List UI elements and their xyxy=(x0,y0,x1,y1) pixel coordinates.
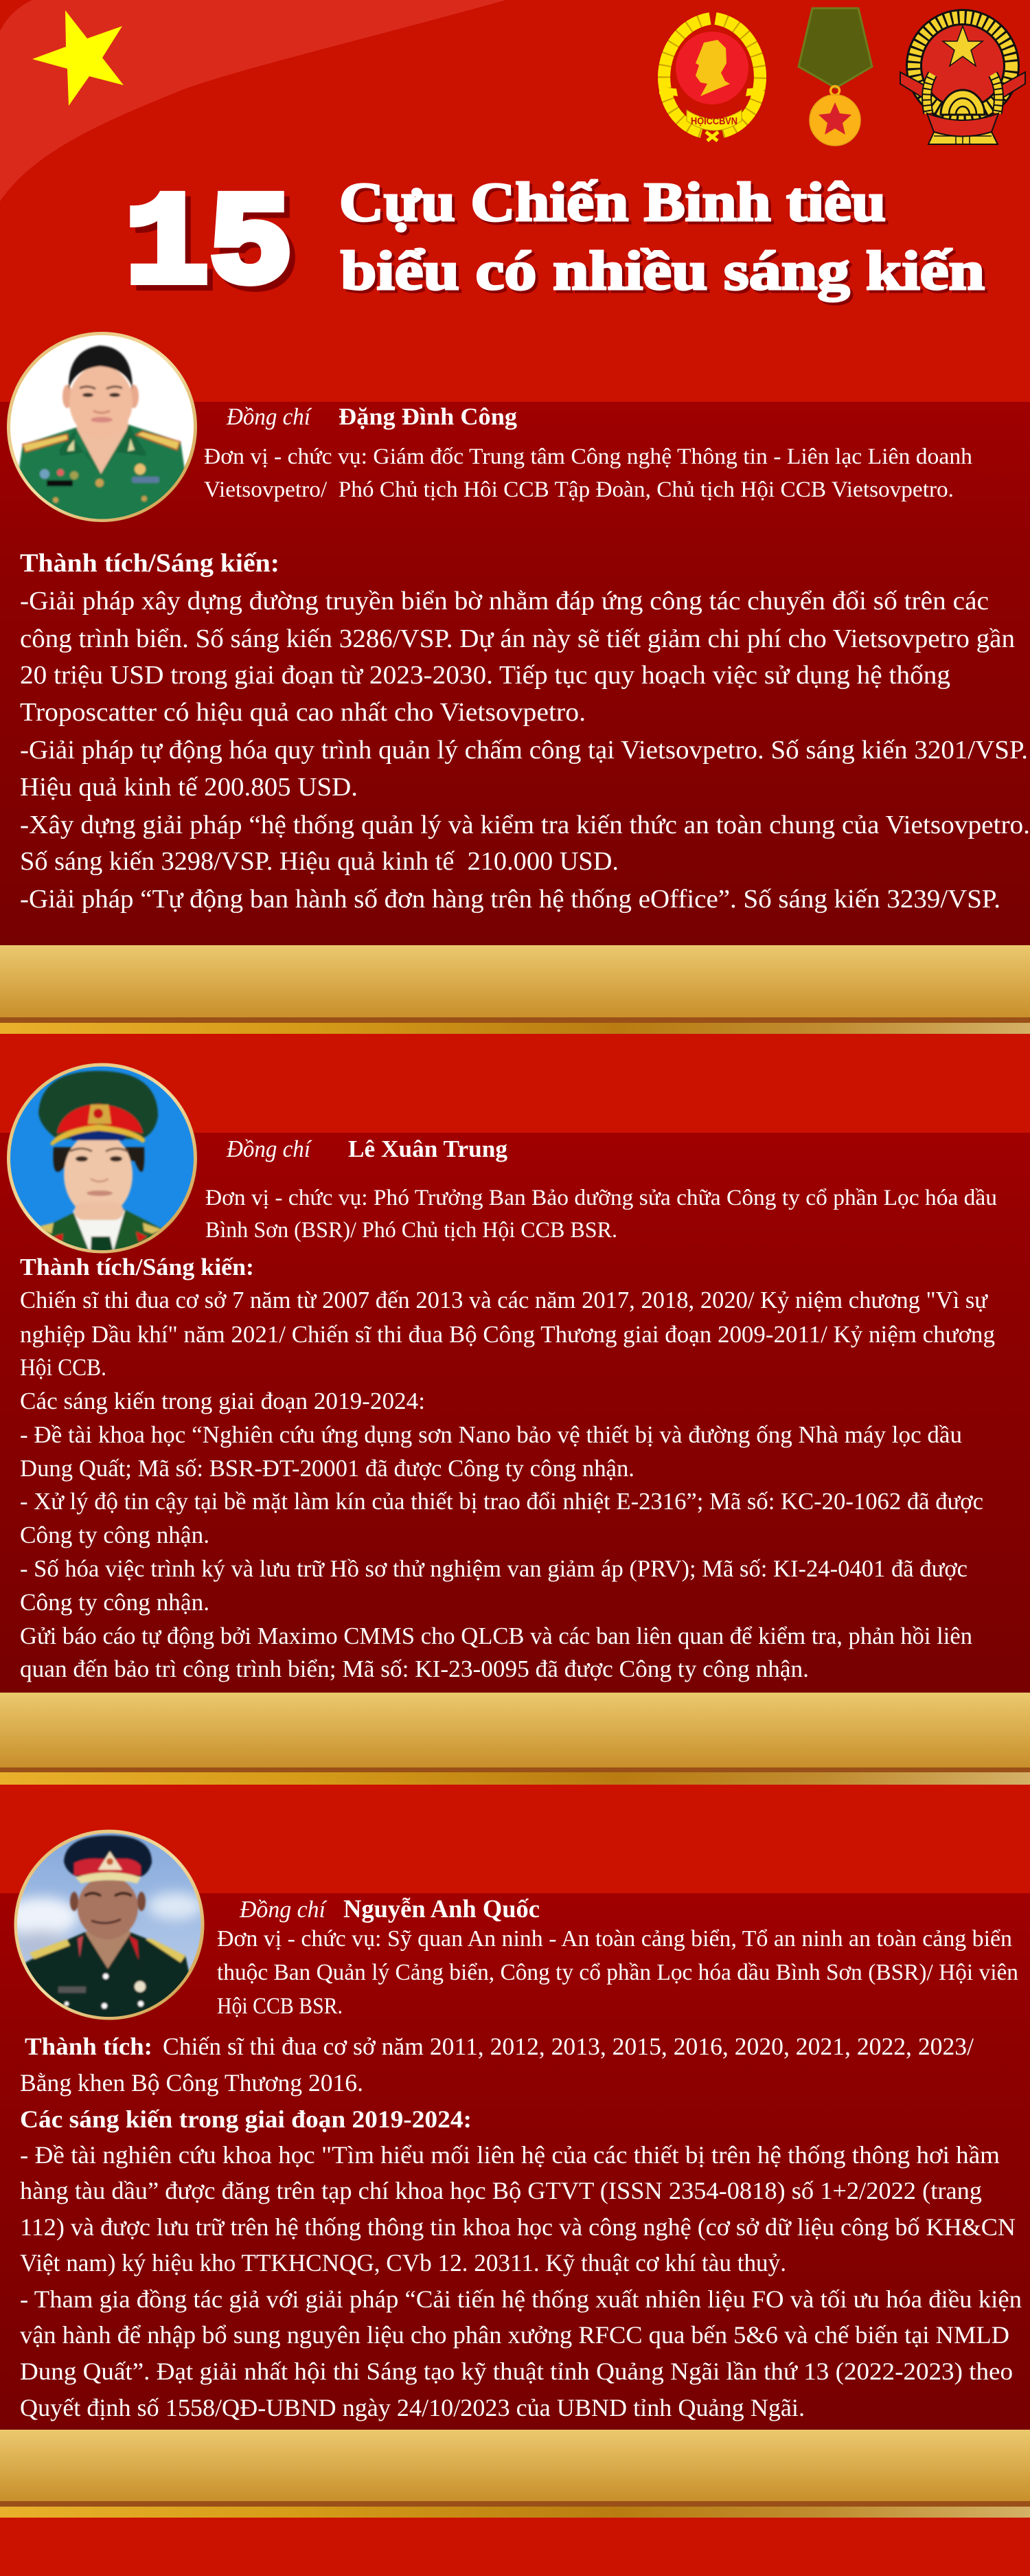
name heading: Đồng chí xyxy=(239,1896,328,1923)
achievements text: - Đề tài khoa học “Nghiên cứu ứng dụng sơn Nano bảo vệ thiết bị và đường ống Nhà máy lọc dầu xyxy=(20,1421,962,1448)
decorative header swoosh xyxy=(0,0,506,201)
achievements text: quan đến bảo trì công trình biển; Mã số: KI-23-0095 đã được Công ty công nhận. xyxy=(20,1656,809,1682)
gold star xyxy=(943,26,983,66)
achievements text: Việt nam) ký hiệu kho TTKHCNQG, CVb 12. 20311. Kỹ thuật cơ khí tàu thuỷ. xyxy=(20,2249,786,2276)
achievements text: Bằng khen Bộ Công Thương 2016. xyxy=(20,2069,363,2097)
title line one: Cựu Chiến Binh tiêu xyxy=(342,175,889,236)
knot xyxy=(706,132,718,141)
achievements text: -Xây dựng giải pháp “hệ thống quản lý và kiểm tra kiến thức an toàn chung của Vietsovpetro. xyxy=(20,811,1030,839)
icon: veterans association badge xyxy=(659,19,764,141)
gold footer band xyxy=(0,1693,1030,1785)
icon: medal xyxy=(799,8,872,146)
red side ribbons xyxy=(900,72,1025,100)
achievements text: Dung Quất; Mã số: BSR-ĐT-20001 đã được Công ty công nhận. xyxy=(20,1455,634,1482)
title line one: Cựu Chiến Binh tiêu xyxy=(339,172,886,233)
panel background xyxy=(0,402,1030,945)
role text xyxy=(217,1926,1018,2019)
role text: Đơn vị - chức vụ: Sỹ quan An ninh - An toàn cảng biển, Tổ an ninh an toàn cảng biển xyxy=(217,1926,1012,1952)
wreath xyxy=(664,19,760,132)
achievements text: Các sáng kiến trong giai đoạn 2019-2024: xyxy=(20,1388,425,1414)
lower ribbon xyxy=(927,113,998,136)
achievements text: - Đề tài nghiên cứu khoa học "Tìm hiểu mối liên hệ của các thiết bị trên hệ thống thông hơi hầm xyxy=(20,2141,1000,2169)
achievements text: hàng tàu dầu” được đăng trên tạp chí khoa học Bộ GTVT (ISSN 2354-0818) số 1+2/2022 (trang xyxy=(20,2177,982,2204)
achievements text: Các sáng kiến trong giai đoạn 2019-2024: xyxy=(20,2105,472,2133)
achievements text: nghiệp Dầu khí" năm 2021/ Chiến sĩ thi đua Bộ Công Thương giai đoạn 2009-2011/ Kỷ niệm chương xyxy=(20,1321,995,1348)
name heading: Đặng Đình Công xyxy=(339,403,518,430)
achievements text: Dung Quất”. Đạt giải nhất hội thi Sáng tạo kỹ thuật tỉnh Quảng Ngãi lần thứ 13 (2022-2023) theo xyxy=(20,2358,1013,2385)
portrait photo xyxy=(8,1065,195,1264)
role text: Đơn vị - chức vụ: Giám đốc Trung tâm Công nghệ Thông tin - Liên lạc Liên doanh xyxy=(204,444,973,469)
name heading: Đồng chí xyxy=(226,403,312,430)
achievements text: -Giải pháp tự động hóa quy trình quản lý chấm công tại Vietsovpetro. Số sáng kiến 3201/VSP. xyxy=(20,736,1028,765)
ribbon xyxy=(799,8,872,88)
number 15: 15 xyxy=(125,173,293,321)
panel background xyxy=(0,1133,1030,1693)
side bands xyxy=(659,87,764,96)
base stripes xyxy=(928,129,998,144)
role text: Hội CCB BSR. xyxy=(217,1993,343,2019)
achievements text: -Giải pháp “Tự động ban hành số đơn hàng trên hệ thống eOffice”. Số sáng kiến 3239/VSP. xyxy=(20,885,1000,914)
panel: Đặng Đình Công xyxy=(0,334,1030,1034)
portrait photo xyxy=(3,1831,203,2026)
achievements text: Công ty công nhận. xyxy=(20,1522,209,1548)
role text: Vietsovpetro/ Phó Chủ tịch Hôi CCB Tập Đoàn, Chủ tịch Hội CCB Vietsovpetro. xyxy=(204,477,954,502)
portrait profile xyxy=(696,40,730,96)
title xyxy=(125,172,987,326)
role text xyxy=(204,444,973,502)
role text xyxy=(205,1186,997,1243)
achievements text: -Giải pháp xây dựng đường truyền biển bờ nhằm đáp ứng công tác chuyển đổi số trên các xyxy=(20,587,989,615)
achievements text: công trình biển. Số sáng kiến 3286/VSP. Dự án này sẽ tiết giảm chi phí cho Vietsovpetro gần xyxy=(20,624,1015,653)
panel background xyxy=(0,1893,1030,2430)
number 15: 15 xyxy=(130,179,298,326)
achievements text: Công ty công nhận. xyxy=(20,1589,209,1616)
gold footer band xyxy=(0,945,1030,1034)
medal star xyxy=(819,102,851,135)
panel: Nguyễn Anh Quốc xyxy=(0,1831,1030,2518)
portrait photo xyxy=(8,334,195,529)
achievements text xyxy=(20,549,1030,914)
achievements text: Quyết định số 1558/QĐ-UBND ngày 24/10/2023 của UBND tỉnh Quảng Ngãi. xyxy=(20,2394,805,2421)
role text: thuộc Ban Quản lý Cảng biển, Công ty cổ phần Lọc hóa dầu Bình Sơn (BSR)/ Hội viên xyxy=(217,1960,1018,1985)
achievements text: Chiến sĩ thi đua cơ sở 7 năm từ 2007 đến 2013 và các năm 2017, 2018, 2020/ Kỷ niệm chương "Vì sự xyxy=(20,1287,988,1313)
name heading xyxy=(226,1136,507,1162)
achievements text xyxy=(20,1254,995,1682)
name heading: Đồng chí xyxy=(226,1136,312,1162)
achievements text: Hiệu quả kinh tế 200.805 USD. xyxy=(20,773,358,802)
achievements text: - Tham gia đồng tác giả với giải pháp “Cải tiến hệ thống xuất nhiên liệu FO và tối ưu hóa điều kiện xyxy=(20,2285,1022,2313)
name heading: Lê Xuân Trung xyxy=(348,1136,507,1162)
name heading xyxy=(239,1895,540,1923)
panel: Lê Xuân Trung xyxy=(0,1065,1030,1785)
achievements text: Hội CCB. xyxy=(20,1354,106,1381)
cogwheel xyxy=(941,90,985,115)
icon: yellow flag star xyxy=(32,10,124,106)
wheat ring xyxy=(914,17,1011,115)
title line two: biểu có nhiều sáng kiến xyxy=(343,244,987,304)
achievements text xyxy=(20,2033,1022,2421)
achievements text: vận hành để nhập bổ sung nguyên liệu cho phân xưởng RFCC qua bến 5&6 và chế biến tại NMLD xyxy=(20,2321,1009,2349)
achievements text: Gửi báo cáo tự động bởi Maximo CMMS cho QLCB và các ban liên quan để kiểm tra, phản hồi liên xyxy=(20,1623,972,1649)
achievements text: Thành tích/Sáng kiến: xyxy=(20,549,279,578)
role text: Bình Sơn (BSR)/ Phó Chủ tịch Hội CCB BSR. xyxy=(205,1218,617,1243)
red medallion xyxy=(676,32,748,104)
achievements text: Số sáng kiến 3298/VSP. Hiệu quả kinh tế 210.000 USD. xyxy=(20,847,619,876)
achievements text: Thành tích/Sáng kiến: xyxy=(20,1254,254,1280)
title line two: biểu có nhiều sáng kiến xyxy=(341,241,985,302)
achievements text: - Xử lý độ tin cậy tại bề mặt làm kín của thiết bị trao đổi nhiệt E-2316”; Mã số: KC-20-1062 đã được xyxy=(20,1488,983,1515)
ribbon with association name xyxy=(687,110,742,131)
achievements text: Chiến sĩ thi đua cơ sở năm 2011, 2012, 2013, 2015, 2016, 2020, 2021, 2022, 2023/ xyxy=(163,2033,974,2060)
gold footer band xyxy=(0,2430,1030,2518)
achievements text: 112) và được lưu trữ trên hệ thống thông tin khoa học và công nghệ (cơ sở dữ liệu công bố KH&CN xyxy=(20,2213,1016,2241)
name heading: Nguyễn Anh Quốc xyxy=(343,1895,540,1923)
medal disc xyxy=(810,95,860,146)
name heading xyxy=(226,403,518,430)
achievements text: Troposcatter có hiệu quả cao nhất cho Vietsovpetro. xyxy=(20,698,586,727)
ribbon with association name: HỘICCBVN xyxy=(691,115,737,127)
ring xyxy=(831,87,839,95)
achievements text: Thành tích: xyxy=(25,2033,152,2060)
inner wheat sheaves xyxy=(927,74,998,113)
role text: Đơn vị - chức vụ: Phó Trưởng Ban Bảo dưỡng sửa chữa Công ty cổ phần Lọc hóa dầu xyxy=(205,1186,997,1210)
achievements text: 20 triệu USD trong giai đoạn từ 2023-2030. Tiếp tục quy hoạch việc sử dụng hệ thống xyxy=(20,661,950,690)
achievements text: - Số hóa việc trình ký và lưu trữ Hồ sơ thử nghiệm van giảm áp (PRV); Mã số: KI-24-0401 đã được xyxy=(20,1555,968,1582)
icon: national emblem xyxy=(900,17,1025,144)
